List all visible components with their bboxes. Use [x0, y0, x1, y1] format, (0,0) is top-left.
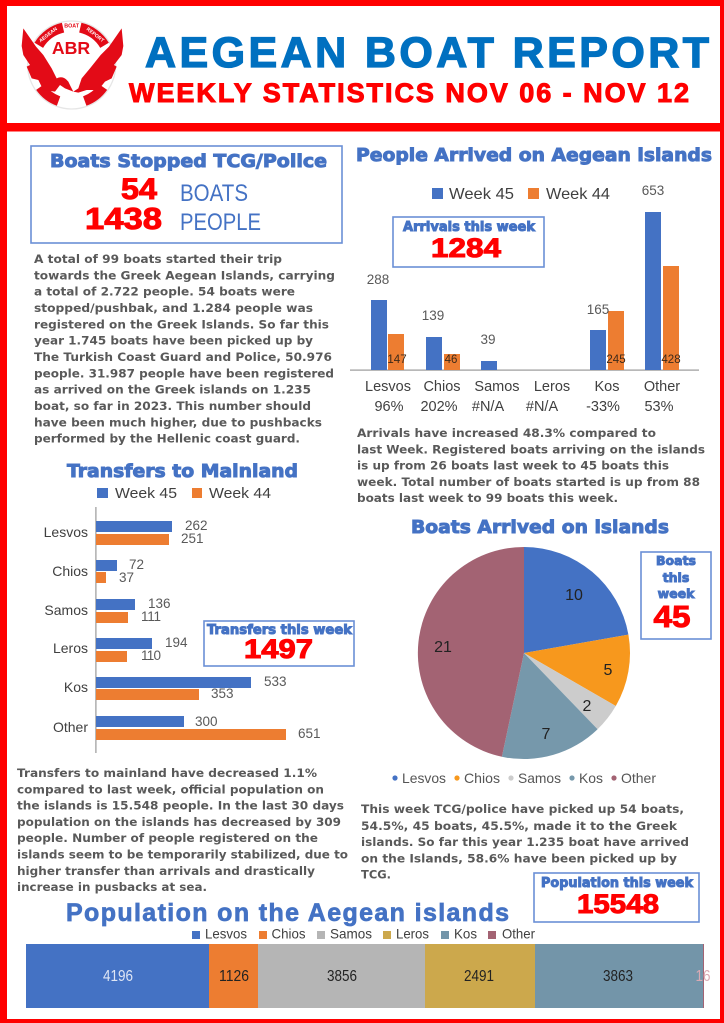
bar chart: people arrived — [350, 183, 699, 415]
stat: 54 boats: BOATS — [180, 180, 248, 207]
callout: arrivals this week: 1284 — [431, 233, 501, 263]
text block: transfers summary: people. Number of people registered on the — [17, 831, 318, 845]
bar chart: transfers to mainland: 37 — [119, 570, 134, 585]
bar chart: transfers to mainland: Leros — [53, 640, 88, 656]
stat: 54 boats: 54 — [121, 173, 157, 206]
bar chart: transfers to mainland: 251 — [181, 531, 204, 546]
bar chart: people arrived: 53% — [644, 399, 674, 415]
bar chart: transfers to mainland — [44, 485, 321, 753]
bar chart: people arrived: 653 — [642, 183, 664, 198]
legend: population chart: Other — [502, 926, 535, 942]
stacked bar chart: population — [26, 926, 710, 1008]
text block: transfers summary: population on the islands has decreased by 309 — [17, 815, 341, 829]
text block: arrivals summary: Arrivals have increased 48.3% compared to — [357, 426, 656, 440]
legend: population chart: Lesvos — [205, 926, 247, 942]
legend: arrivals chart — [432, 186, 610, 203]
text block: transfers summary: compared to last week, official population on — [17, 782, 324, 796]
panel: boats stopped — [31, 146, 342, 243]
callout: population this week: Population this week — [541, 876, 693, 891]
text block: transfers summary: Transfers to mainland have decreased 1.1% — [17, 766, 317, 780]
callout: boats this week: Boats — [656, 553, 696, 568]
legend: pie chart: Chios — [464, 770, 500, 786]
icon: ABR winged lifebuoy logo: BOAT — [64, 23, 80, 29]
bar chart: transfers to mainland: 110 — [141, 648, 161, 663]
callout: transfers this week — [204, 621, 354, 666]
text block: arrivals summary: week. Total number of boats started is up from 88 — [357, 475, 700, 489]
bar chart: people arrived: -33% — [586, 399, 620, 415]
legend: arrivals chart: Week 45 — [449, 186, 514, 203]
heading: people arrived: People Arrived on Aegean islands — [356, 145, 712, 166]
callout: transfers this week: 1497 — [244, 634, 313, 664]
callout: arrivals this week — [393, 217, 544, 267]
bar chart: transfers to mainland: 300 — [195, 714, 218, 729]
heading: transfers to mainland: Transfers to Mainland — [67, 461, 298, 482]
heading: population: Population on the Aegean islands — [66, 899, 509, 927]
pie chart: boats arrived: 7 — [542, 726, 551, 743]
stacked bar chart: population: 3856 — [327, 968, 357, 985]
heading: boats stopped: Boats Stopped TCG/Police — [50, 151, 327, 172]
legend: pie chart: Samos — [518, 770, 561, 786]
bar chart: people arrived: Lesvos — [365, 379, 411, 395]
icon: ABR winged lifebuoy logo: REPORT — [85, 26, 105, 44]
bar chart: people arrived: 46 — [445, 354, 457, 366]
text block: boats arrived summary: This week TCG/police have picked up 54 boats, — [361, 802, 684, 816]
stacked bar chart: population: 16 — [696, 968, 710, 985]
legend: pie chart: Kos — [579, 770, 603, 786]
legend: transfers chart: Week 45 — [115, 485, 177, 502]
stat: 1438 people: 1438 — [85, 201, 162, 236]
legend: population chart — [192, 926, 535, 942]
text block: transfers summary: the islands is 15.548 people. In the last 30 days — [17, 799, 344, 813]
callout: transfers this week: Transfers this week — [207, 623, 352, 638]
bar chart: people arrived: 39 — [480, 332, 496, 347]
text block: transfers summary: higher transfer than arrivals and drastically — [17, 864, 316, 878]
text block: boats summary: year 1.745 boats have been picked up by — [34, 334, 314, 348]
icon: ABR winged lifebuoy logo: AEGEAN — [38, 26, 59, 44]
icon: ABR winged lifebuoy logo: ABR — [52, 38, 90, 58]
text block: arrivals summary — [357, 426, 705, 505]
bar chart: people arrived: Samos — [474, 379, 520, 395]
panel: header — [7, 6, 720, 123]
legend: population chart: Chios — [272, 926, 306, 942]
pie chart: boats arrived — [392, 547, 656, 786]
stacked bar chart: population: 1126 — [219, 968, 249, 985]
bar chart: transfers to mainland: Other — [53, 719, 88, 735]
legend: population chart: Leros — [396, 926, 429, 942]
legend: pie chart — [392, 770, 656, 786]
text block: boats arrived summary: islands. So far this year 1.235 boat have arrived — [361, 835, 689, 849]
bar chart: people arrived: #N/A — [526, 399, 558, 415]
text block: boats summary: a total of 2.722 people. 54 boats were — [34, 285, 295, 299]
bar chart: people arrived: 96% — [374, 399, 404, 415]
stat: 54 boats — [121, 173, 248, 207]
heading: boats arrived: Boats Arrived on islands — [411, 517, 669, 538]
bar chart: transfers to mainland: 194 — [165, 635, 188, 650]
pie chart: boats arrived: 2 — [583, 698, 592, 715]
bar chart: transfers to mainland: Chios — [52, 563, 88, 579]
bar chart: transfers to mainland: 72 — [129, 557, 144, 572]
text block: arrivals summary: last Week. Registered boats arriving on the islands — [357, 442, 705, 456]
pie chart: boats arrived: 5 — [604, 662, 613, 679]
subtitle: dates: WEEKLY STATISTICS NOV 06 - NOV 12 — [129, 78, 689, 108]
bar chart: transfers to mainland: 136 — [148, 596, 171, 611]
bar chart: transfers to mainland: 651 — [298, 726, 321, 741]
callout: boats this week: week — [658, 586, 695, 601]
callout: boats this week — [641, 552, 711, 639]
bar chart: transfers to mainland: 533 — [264, 674, 287, 689]
legend: pie chart: Other — [621, 770, 656, 786]
text block: transfers summary: islands seem to be temporarily stabilized, due to — [17, 848, 348, 862]
callout: population this week: 15548 — [577, 889, 659, 919]
pie chart: boats arrived: 10 — [565, 587, 583, 604]
text block: boats summary: The Turkish Coast Guard and Police, 50.976 — [34, 350, 332, 364]
bar chart: people arrived: Other — [644, 379, 680, 395]
bar chart: transfers to mainland: 111 — [141, 609, 161, 624]
legend: transfers chart: Week 44 — [209, 485, 271, 502]
bar chart: people arrived: 428 — [661, 354, 681, 366]
text block: boats summary: performed by the Hellenic coast guard. — [34, 432, 300, 446]
text block: transfers summary: increase in pusbacks at sea. — [17, 880, 207, 894]
legend: population chart: Samos — [330, 926, 372, 942]
legend: transfers chart — [97, 485, 271, 502]
bar chart: transfers to mainland: 353 — [211, 686, 234, 701]
stacked bar chart: population: 3863 — [603, 968, 633, 985]
text block: boats summary: A total of 99 boats started their trip — [34, 252, 282, 266]
text block: boats arrived summary: 54.5%, 45 boats, 45.5%, made it to the Greek — [361, 819, 677, 833]
callout: arrivals this week: Arrivals this week — [403, 220, 535, 235]
bar chart: people arrived: Leros — [534, 379, 570, 395]
text block: boats summary — [34, 252, 335, 446]
text block: boats summary: registered on the Greek Islands. So far this — [34, 317, 329, 331]
stat: 1438 people: PEOPLE — [180, 209, 261, 236]
text block: boats summary: as arrived on the Greek islands on 1.235 — [34, 383, 311, 397]
bar chart: people arrived: 245 — [606, 354, 626, 366]
bar chart: people arrived: 165 — [587, 302, 609, 317]
legend: population chart: Kos — [454, 926, 477, 942]
text block: boats summary: stopped/pushbak, and 1.284 people was — [34, 301, 313, 315]
title: AEGEAN BOAT REPORT — [145, 29, 709, 77]
bar chart: people arrived: 139 — [422, 308, 444, 323]
text block: transfers summary — [17, 766, 348, 894]
callout: boats this week: 45 — [654, 599, 690, 634]
bar chart: people arrived: Chios — [423, 379, 461, 395]
pie chart: boats arrived: 21 — [434, 639, 452, 656]
bar chart: transfers to mainland: Kos — [64, 679, 88, 695]
bar chart: transfers to mainland: 262 — [185, 518, 208, 533]
bar chart: people arrived: 288 — [367, 272, 389, 287]
stacked bar chart: population: 4196 — [103, 968, 133, 985]
text block: boats summary: towards the Greek Aegean Islands, carrying — [34, 268, 335, 282]
stat: 1438 people — [85, 201, 261, 236]
legend: arrivals chart: Week 44 — [546, 186, 610, 203]
callout: population this week — [534, 873, 699, 922]
bar chart: people arrived: 202% — [420, 399, 458, 415]
legend: pie chart: Lesvos — [402, 770, 446, 786]
bar chart: people arrived: #N/A — [472, 399, 504, 415]
text block: boats summary: people. 31.987 people have been registered — [34, 366, 334, 380]
bar chart: transfers to mainland: Samos — [44, 602, 88, 618]
bar chart: transfers to mainland: Lesvos — [44, 524, 88, 540]
text block: arrivals summary: is up from 26 boats last week to 45 boats this — [357, 459, 669, 473]
text block: boats summary: boat, so far in 2023. This number should — [34, 399, 311, 413]
text block: boats arrived summary: TCG. — [361, 868, 391, 882]
stacked bar chart: population: 2491 — [464, 968, 494, 985]
bar chart: people arrived: 147 — [387, 354, 407, 366]
text block: boats arrived summary — [361, 802, 689, 882]
text block: arrivals summary: boats last week to 99 boats this week. — [357, 491, 618, 505]
icon: ABR winged lifebuoy logo — [22, 21, 123, 109]
text block: boats arrived summary: on the Islands, 58.6% have been picked up by — [361, 852, 678, 866]
text block: boats summary: have been much higher, due to pushbacks — [34, 415, 322, 429]
bar chart: people arrived: Kos — [594, 379, 620, 395]
callout: boats this week: this — [663, 570, 689, 585]
